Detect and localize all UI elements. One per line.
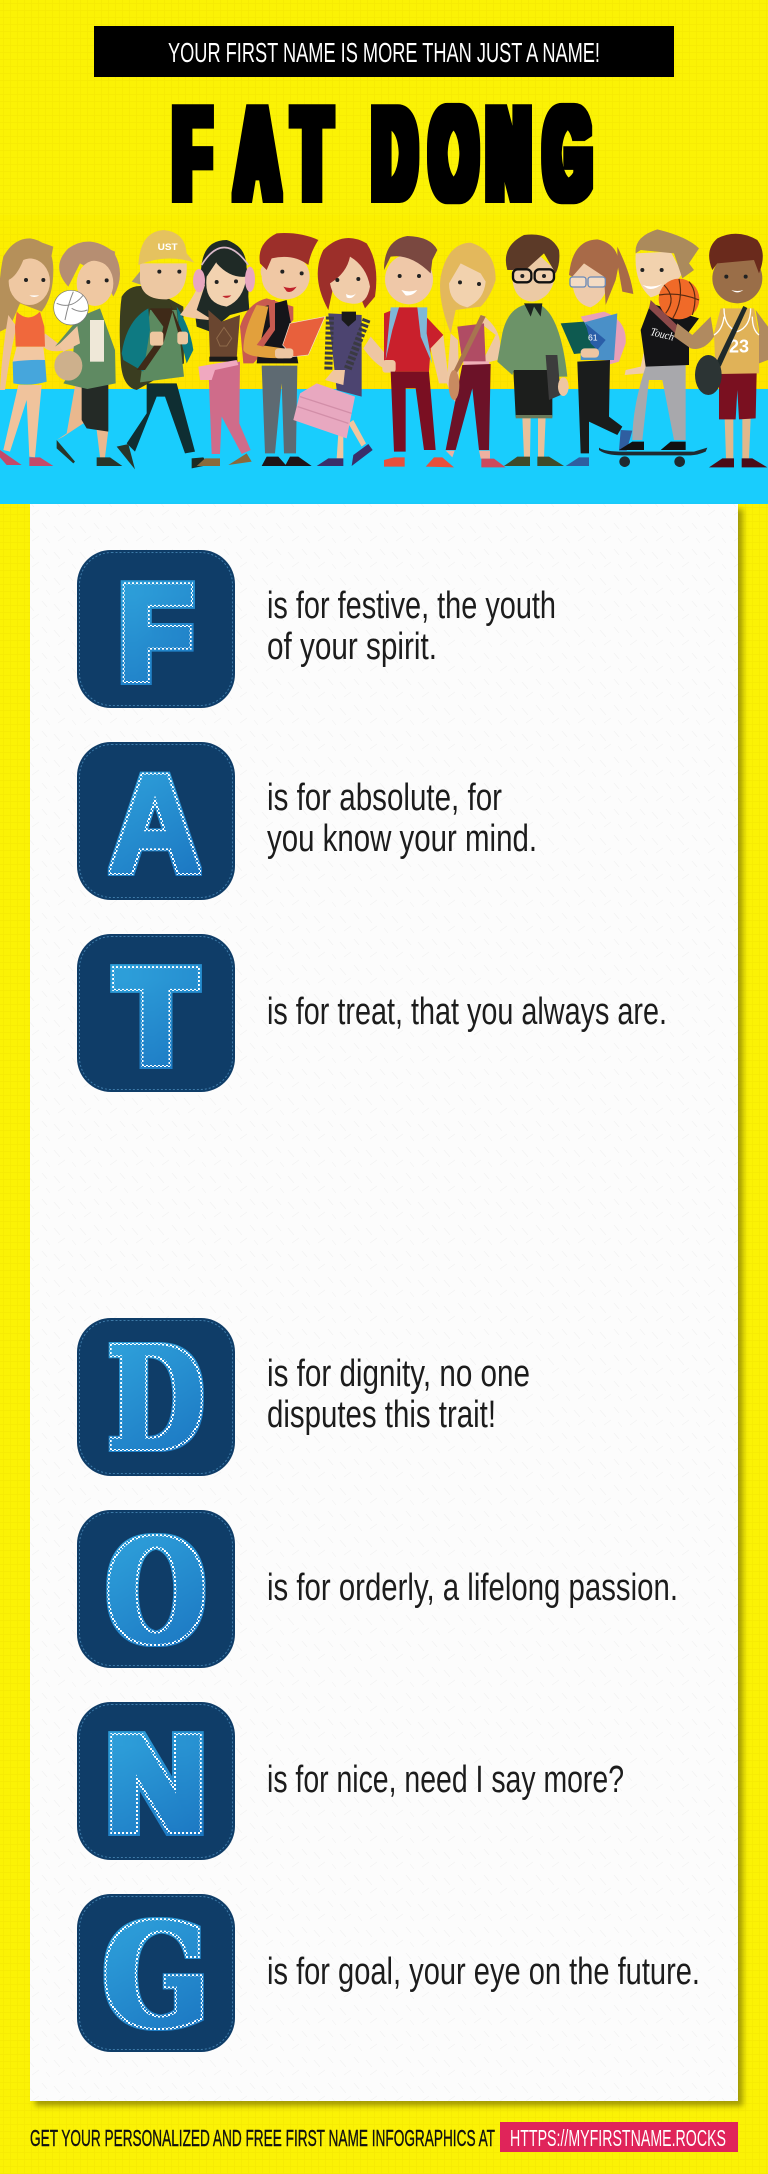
text: D: is for dignity, no one [267,1353,530,1395]
icon: tile A: A [108,745,202,902]
icon: tile F: F [120,558,192,706]
person: boy on skateboard with basketball: Touch [649,326,676,344]
person: boy in red shirt [363,236,454,467]
text: F: of your spirit. [267,626,437,668]
text: D: disputes this trait! [267,1394,496,1436]
person: girl with volleyball [54,242,122,466]
person: girl with tablet and ponytail [561,239,633,466]
icon: tile G: G [102,1895,210,2059]
row: letter A [77,742,537,902]
footer [30,2122,738,2152]
icon: tile D: D [107,1317,205,1481]
icon: tile O [77,1510,235,1675]
icon: tile T: T [116,943,196,1090]
icon: tile G [77,1894,235,2059]
person: boy with book [240,233,325,466]
row: letter G [77,1894,700,2059]
person: boy with glasses [497,234,569,466]
icon: tile D [77,1317,235,1481]
icon: tile N [77,1702,235,1860]
text: N: is for nice, need I say more? [267,1759,624,1801]
person: girl with pink bag [293,238,376,466]
floor band [0,389,768,504]
icon: tile T [77,934,235,1092]
people illustration [0,229,768,469]
person: girl in orange top [0,238,80,466]
text: F: is for festive, the youth [267,585,556,627]
person: blonde girl [440,243,506,467]
person: boy in yellow tank top [695,234,768,467]
icon: tile O: O [105,1510,207,1675]
person: boy in yellow tank top: 23 [729,336,749,357]
person: girl with headphones [180,240,255,466]
subtitle banner [94,26,674,77]
panel: white card [30,504,738,2101]
row: letter T [77,934,667,1092]
person: boy on skateboard with basketball [599,229,714,467]
person: girl with tablet and ponytail: 61 [588,333,598,343]
person: boy with backpack and cap [117,230,208,469]
icon: tile F [77,550,235,708]
icon: tile N: N [106,1709,206,1857]
row: letter O [77,1510,678,1675]
text: A: is for absolute, for [267,777,502,819]
text: A: you know your mind. [267,818,537,860]
title: FAT DONG: FATDONG [174,82,591,226]
person: boy with backpack and cap: UST [158,242,178,252]
row: letter F [77,550,556,708]
row: letter N [77,1702,624,1860]
icon: tile A [77,742,235,902]
row: letter D [77,1317,530,1481]
